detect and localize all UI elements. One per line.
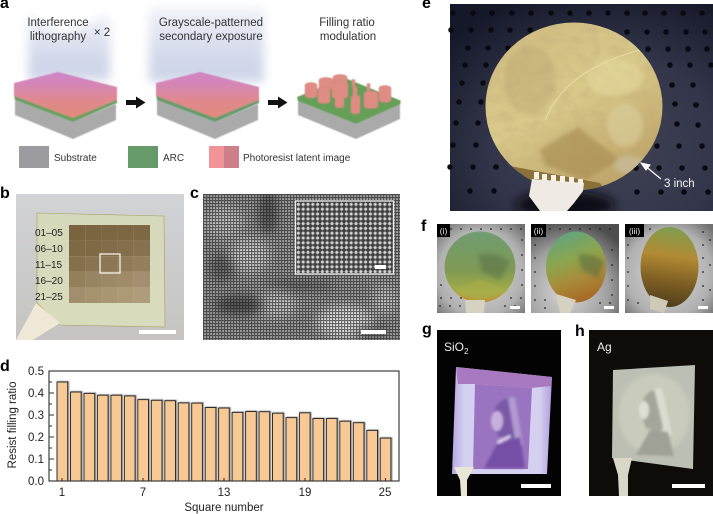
scale bar <box>521 484 551 488</box>
y tick labels: 0.0 <box>28 476 44 488</box>
SEM background <box>203 194 400 340</box>
panel letter c: c <box>190 185 199 202</box>
shadow below wafer <box>511 188 619 211</box>
wafer holder <box>529 179 584 211</box>
sample label: SiO <box>444 340 464 354</box>
x tick labels: 13 <box>218 487 230 499</box>
holder grips <box>534 172 583 184</box>
legend: substrate: Substrate <box>54 153 97 164</box>
label: interference lithography: lithography <box>30 31 86 43</box>
y tick labels <box>28 366 45 488</box>
photo ii: (ii) <box>534 226 543 236</box>
inset scale bar <box>375 265 386 269</box>
portrait field <box>473 384 532 469</box>
axes frame and ticks <box>49 371 399 481</box>
SEM blotches <box>204 194 400 340</box>
panel f: colour wafers at three angles <box>421 218 713 313</box>
row labels: 16–20 <box>35 276 63 287</box>
photoresist sample <box>37 213 165 327</box>
portrait <box>484 397 525 468</box>
block 1 <box>14 72 117 139</box>
y tick labels: 0.3 <box>28 410 44 422</box>
selection square <box>100 254 120 273</box>
arrow 2 <box>268 96 288 108</box>
bars <box>57 382 391 481</box>
scale bar <box>361 330 386 334</box>
row labels: 01–05 <box>35 228 63 239</box>
tweezers <box>613 458 632 496</box>
legend: photoresist latent image <box>209 146 351 168</box>
photo background <box>16 194 184 340</box>
scale bar <box>672 484 705 488</box>
wafer lower rim <box>512 166 602 190</box>
exposure beams 1 <box>28 14 110 80</box>
photo iii: (iii) <box>629 226 640 236</box>
label: interference lithography: Interference <box>27 17 89 29</box>
sample label: 2 <box>464 347 469 356</box>
sample label: Ag <box>597 340 612 354</box>
y tick labels: 0.4 <box>28 388 45 400</box>
label: secondary exposure: Grayscale-patterned <box>159 17 263 29</box>
panel letter d: d <box>0 358 10 375</box>
panel c: SEM image <box>190 185 400 340</box>
photo i: (i) <box>440 226 447 236</box>
5x5 square grid <box>69 225 150 303</box>
legend: ARC <box>128 146 184 168</box>
label: interference lithography <box>27 17 110 43</box>
y tick labels: 0.5 <box>28 366 44 378</box>
row labels: 11–15 <box>35 260 63 271</box>
panel h: Ag portrait sample <box>575 323 713 496</box>
tweezers <box>454 467 474 496</box>
panel letter f: f <box>421 218 427 235</box>
sheet interior <box>618 374 690 454</box>
block 3 with pillars <box>297 74 400 139</box>
label: secondary exposure <box>159 17 263 43</box>
photo background <box>437 330 561 496</box>
panel letter b: b <box>0 185 10 202</box>
exposure beams 2 <box>149 8 264 82</box>
label: filling ratio modulation <box>319 17 376 43</box>
inset magnified lattice <box>296 201 394 274</box>
row labels: 06–10 <box>35 244 63 255</box>
wafer <box>486 22 662 190</box>
dimension arrow <box>641 163 661 179</box>
panel a: fabrication process <box>0 0 400 168</box>
panel e: 3 inch wafer photograph <box>422 0 713 219</box>
scale bar <box>139 330 176 334</box>
arrow 1 <box>126 96 146 108</box>
legend: ARC: ARC <box>163 153 184 164</box>
panel letter h: h <box>575 323 585 340</box>
sample sheet <box>452 367 552 474</box>
portrait <box>636 388 674 456</box>
photo ii <box>531 224 619 313</box>
x axis title: Square number <box>184 502 264 514</box>
label: secondary exposure: secondary exposure <box>159 31 263 43</box>
x tick labels <box>59 487 391 499</box>
block 2 <box>156 72 259 139</box>
legend: substrate <box>19 146 97 168</box>
y axis title: Resist filling ratio <box>7 382 19 468</box>
photo iii <box>625 224 713 313</box>
wafer curved line <box>545 50 640 120</box>
photo background <box>450 4 713 211</box>
x tick labels: 1 <box>59 487 65 499</box>
y tick labels: 0.2 <box>28 432 44 444</box>
panel letter g: g <box>422 321 432 338</box>
label: filling ratio modulation: modulation <box>320 31 376 43</box>
photo i <box>437 224 525 313</box>
panel d: bar chart of resist filling ratio <box>0 358 399 514</box>
tweezers <box>16 303 60 340</box>
x tick labels: 7 <box>140 487 146 499</box>
wafer patterned texture <box>488 24 653 190</box>
dimension label: 3 inch <box>664 178 695 190</box>
x tick labels: 25 <box>379 487 391 499</box>
sample sheet <box>612 365 695 469</box>
legend: photoresist latent image: Photoresist latent image <box>243 153 351 164</box>
SEM lattice <box>203 194 400 340</box>
x tick labels: 19 <box>299 487 311 499</box>
row labels <box>35 228 63 303</box>
label: filling ratio modulation: Filling ratio <box>319 17 375 29</box>
sheet top band <box>456 367 552 388</box>
panel g: SiO2 portrait sample <box>422 321 561 496</box>
panel b: sample photograph <box>0 185 184 340</box>
optical table holes <box>450 13 711 192</box>
photo background <box>589 330 713 496</box>
label: interference lithography: × 2 <box>94 27 110 39</box>
y tick labels: 0.1 <box>28 454 44 466</box>
row labels: 21–25 <box>35 292 63 303</box>
